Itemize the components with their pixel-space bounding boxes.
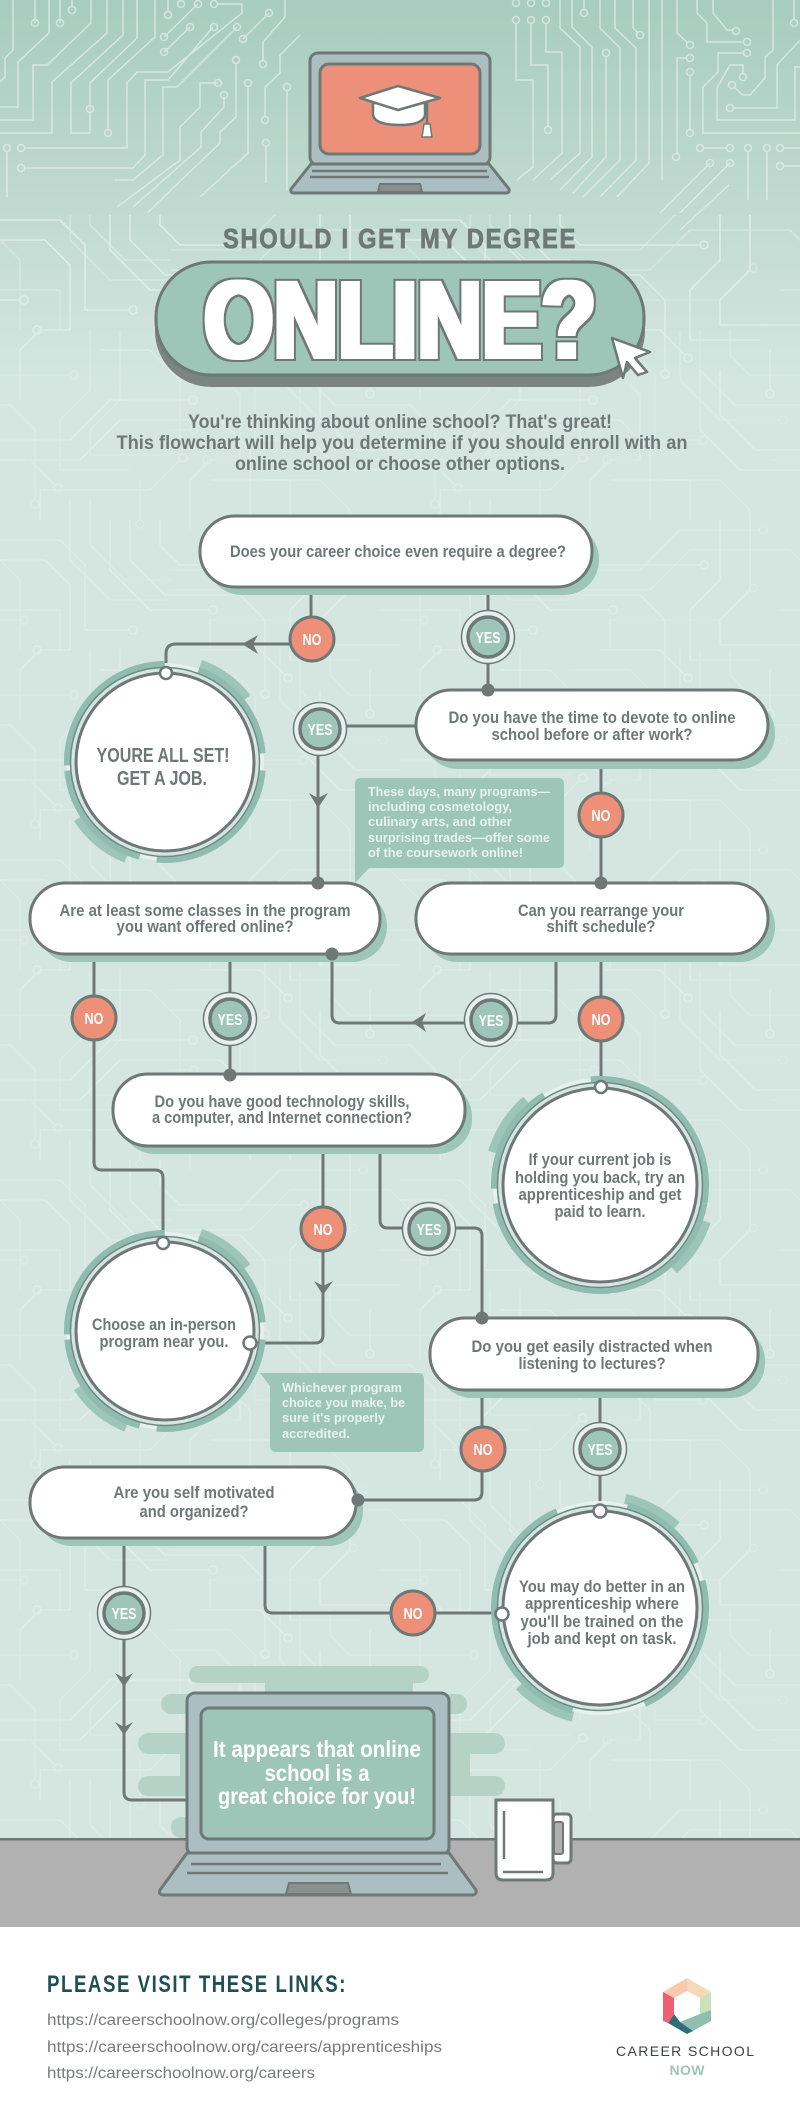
- circuit pattern top right: [512, 0, 800, 230]
- circuit pattern lower offset layer: [0, 215, 800, 1840]
- node: no 4: [579, 997, 623, 1041]
- connector: question 3 no to in-person: [94, 954, 163, 1243]
- connector: question 5 no to in-person: [250, 1146, 323, 1343]
- question 7: [30, 1467, 363, 1546]
- node: no 6: [461, 1427, 505, 1471]
- question 7: and organized?: [140, 1503, 248, 1521]
- connector: question 4 no to apprenticeship: [600, 954, 602, 1087]
- arrow: left to job: [242, 635, 258, 654]
- node: yes 5: YES: [416, 1222, 442, 1239]
- footer panel: [0, 1927, 800, 2122]
- node: yes 3: [204, 992, 256, 1046]
- laptop: final result: It appears that online: [213, 1736, 421, 1762]
- outcome circle: in-person: program near you.: [100, 1332, 228, 1351]
- intro text: [116, 412, 688, 475]
- outcome circle: get a job: GET A JOB.: [117, 768, 207, 790]
- arrow: left to question 3: [412, 1013, 426, 1032]
- outcome circle: apprenticeship paid: holding you back, try an: [515, 1168, 685, 1187]
- callout: programs note: These days, many programs—: [368, 784, 550, 799]
- callout: accreditation note: [260, 1373, 424, 1452]
- decorative clouds behind laptop: [138, 1666, 505, 1838]
- node: yes 5: [402, 1202, 456, 1256]
- node: no 2: [579, 793, 623, 837]
- connector: question 7 yes to laptop: [124, 1538, 186, 1800]
- arrow: down to laptop lower: [115, 1722, 133, 1735]
- callout: accreditation note: Whichever program: [282, 1380, 402, 1395]
- question 2: Do you have the time to devote to online: [448, 709, 736, 727]
- question 1: Does your career choice even require a degree?: [230, 543, 566, 561]
- question 6: [430, 1318, 765, 1398]
- question 3: Are at least some classes in the program: [60, 902, 350, 920]
- connector: question 2 no to question 4: [600, 760, 602, 883]
- connector: question 1 to question 2: [486, 587, 490, 690]
- node: yes 3: YES: [218, 1012, 243, 1029]
- question 1: [200, 516, 599, 595]
- node: no 5: NO: [314, 1222, 332, 1239]
- icon: cursor: [612, 338, 650, 378]
- node: yes 4: YES: [478, 1013, 504, 1030]
- node: no 2: NO: [592, 808, 610, 825]
- callout: programs note: [355, 778, 564, 883]
- node: yes 6: YES: [588, 1442, 613, 1459]
- laptop: final result: [160, 1693, 476, 1895]
- outcome circle: get a job: YOURE ALL SET!: [96, 745, 230, 767]
- icon: laptop with graduation cap: [291, 53, 509, 193]
- question 3: [30, 883, 387, 962]
- outcome circle: in-person: Choose an in-person: [92, 1315, 236, 1334]
- laptop: final result: school is a: [264, 1760, 370, 1786]
- outcome circle: apprenticeship on task: You may do better in an: [519, 1577, 685, 1596]
- outcome circle: apprenticeship paid: [459, 1044, 741, 1326]
- intro text: This flowchart will help you determine if you should enroll with an: [116, 433, 688, 454]
- arrow: down to in-person: [314, 1281, 333, 1295]
- connector: question 6 no to question 7: [358, 1390, 482, 1500]
- connector: question 3 yes to question 5: [228, 954, 232, 1075]
- title pill: online: ONLINE?: [204, 259, 596, 382]
- question 3: you want offered online?: [116, 918, 294, 936]
- node: no 3: [72, 996, 116, 1040]
- circuit pattern top left: [0, 0, 300, 213]
- circuit pattern lower: [0, 215, 800, 1840]
- callout: accreditation note: choice you make, be: [282, 1395, 405, 1410]
- connector: question 4 yes to question 3: [332, 954, 556, 1023]
- callout: programs note: surprising trades—offer some: [368, 830, 550, 845]
- node: yes 7: [98, 1586, 150, 1640]
- icon: mug: [496, 1800, 571, 1880]
- callout: programs note: including cosmetology,: [368, 799, 512, 814]
- node: no 1: NO: [302, 632, 322, 649]
- connector: question 2 yes to question 3: [318, 726, 416, 883]
- footer links: https://careerschoolnow.org/careers: [47, 2065, 315, 2082]
- logo: career school now: NOW: [670, 2062, 705, 2078]
- question 5: a computer, and Internet connection?: [152, 1109, 412, 1127]
- outcome circle: apprenticeship paid: paid to learn.: [554, 1202, 646, 1221]
- footer heading: PLEASE VISIT THESE LINKS:: [47, 1971, 347, 1998]
- node: yes 1: YES: [476, 630, 501, 647]
- intro text: online school or choose other options.: [235, 454, 565, 475]
- question 4: Can you rearrange your: [518, 902, 685, 920]
- node: no 1: [290, 617, 334, 661]
- connector: question 1 to NO and job: [166, 587, 311, 673]
- outcome circle: in-person: [31, 1197, 299, 1465]
- callout: accreditation note: sure it's properly: [282, 1410, 386, 1425]
- outcome circle: apprenticeship paid: apprenticeship and get: [518, 1185, 682, 1204]
- node: no 3: NO: [84, 1011, 104, 1028]
- node: no 5: [301, 1207, 345, 1251]
- arrow: down to laptop upper: [115, 1673, 133, 1687]
- node: yes 7: YES: [112, 1606, 137, 1623]
- outcome circle: apprenticeship on task: apprenticeship where: [525, 1594, 679, 1613]
- desk: [0, 1838, 800, 1927]
- logo: career school now: CAREER SCHOOL: [616, 2043, 754, 2059]
- node: no 7: NO: [404, 1606, 422, 1623]
- connector: question 7 no to apprenticeship: [265, 1538, 502, 1613]
- node: no 7: [391, 1591, 435, 1635]
- question 6: listening to lectures?: [518, 1355, 666, 1373]
- outcome circle: apprenticeship on task: [465, 1473, 735, 1743]
- question 2: school before or after work?: [492, 726, 692, 744]
- callout: programs note: of the coursework online!: [368, 845, 523, 860]
- question 4: [416, 883, 775, 962]
- laptop: final result: great choice for you!: [218, 1783, 416, 1809]
- footer links: [47, 2012, 442, 2082]
- outcome circle: get a job: [31, 628, 299, 896]
- question 5: Do you have good technology skills,: [154, 1093, 410, 1111]
- question 5: [113, 1074, 472, 1154]
- node: yes 1: [462, 610, 514, 664]
- connector: question 6 yes to apprenticeship: [598, 1390, 602, 1511]
- outcome circle: apprenticeship on task: job and kept on task.: [527, 1629, 676, 1648]
- heading: should I get my degree: SHOULD I GET MY DEGREE: [223, 223, 577, 254]
- node: yes 2: [294, 702, 346, 756]
- footer links: https://careerschoolnow.org/colleges/programs: [47, 2012, 399, 2029]
- node: no 6: NO: [474, 1442, 492, 1459]
- connector: question 5 yes to question 6: [380, 1146, 482, 1318]
- connection dots: [224, 684, 608, 1506]
- intro text: You're thinking about online school? That's great!: [188, 412, 612, 433]
- question 7: Are you self motivated: [114, 1484, 274, 1502]
- question 6: Do you get easily distracted when: [472, 1338, 712, 1356]
- question 2: [416, 690, 775, 769]
- node: yes 2: YES: [308, 722, 333, 739]
- icon: graduation cap: [360, 86, 440, 137]
- outcome circle: apprenticeship on task: you'll be trained on the: [520, 1612, 684, 1631]
- icon: hexagon logo: [663, 1978, 711, 2034]
- node: yes 6: [574, 1422, 626, 1476]
- node: yes 4: [464, 994, 518, 1046]
- question 4: shift schedule?: [546, 918, 656, 936]
- outcome circle: apprenticeship paid: If your current job is: [528, 1150, 672, 1169]
- arrow: down to question 3: [309, 793, 328, 808]
- callout: programs note: culinary arts, and other: [368, 814, 512, 829]
- footer links: https://careerschoolnow.org/careers/apprenticeships: [47, 2039, 442, 2056]
- node: no 4: NO: [592, 1012, 610, 1029]
- callout: accreditation note: accredited.: [282, 1426, 350, 1441]
- logo: career school now: [616, 1978, 754, 2078]
